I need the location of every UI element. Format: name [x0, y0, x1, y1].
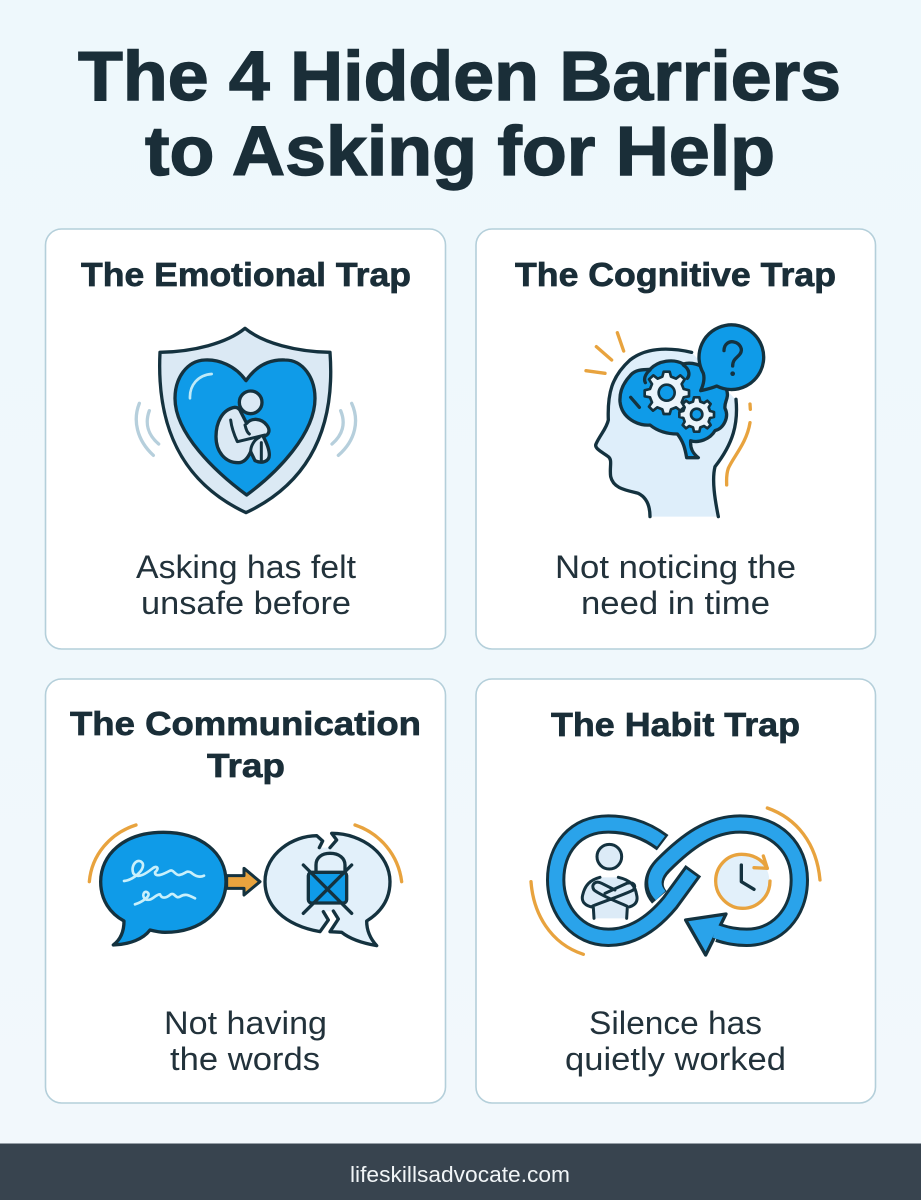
heading: the habit trap: The Habit Trap — [551, 706, 800, 743]
icon: shield with heart and curled-up person — [136, 328, 356, 513]
icon: head with brain, gears and question mark — [586, 325, 764, 517]
title — [78, 37, 841, 190]
description: silence has quietly worked: quietly worked — [565, 1041, 786, 1077]
panel: the communication trap — [46, 679, 446, 1103]
heading: the communication trap: The Communication — [70, 705, 421, 742]
description: silence has quietly worked: Silence has — [589, 1005, 762, 1041]
description: silence has quietly worked — [565, 1005, 786, 1077]
description: asking has felt unsafe before: unsafe before — [141, 585, 351, 621]
footer website text: lifeskillsadvocate.com — [350, 1162, 570, 1187]
title: to Asking for Help — [145, 112, 775, 190]
icon: speech bubble, arrow and broken locked bubble — [89, 825, 402, 946]
heading: the cognitive trap: The Cognitive Trap — [515, 256, 836, 293]
description: not noticing the need in time: need in time — [581, 585, 770, 621]
description: asking has felt unsafe before — [136, 549, 356, 621]
panel: the emotional trap — [46, 229, 446, 649]
description: not noticing the need in time: Not noticing the — [555, 549, 796, 585]
footer bar — [0, 1144, 921, 1200]
icon: infinity loop with person and clock — [531, 808, 820, 955]
description: asking has felt unsafe before: Asking has felt — [136, 549, 356, 585]
heading: the communication trap — [70, 705, 421, 784]
panel: the cognitive trap — [476, 229, 876, 649]
description: not noticing the need in time — [555, 549, 796, 621]
heading: the emotional trap: The Emotional Trap — [81, 256, 411, 293]
description: not having the words — [164, 1005, 327, 1077]
panel: the habit trap — [476, 679, 876, 1103]
title: The 4 Hidden Barriers — [78, 37, 841, 115]
description: not having the words: the words — [170, 1041, 320, 1077]
heading: the communication trap: Trap — [207, 747, 285, 784]
description: not having the words: Not having — [164, 1005, 327, 1041]
